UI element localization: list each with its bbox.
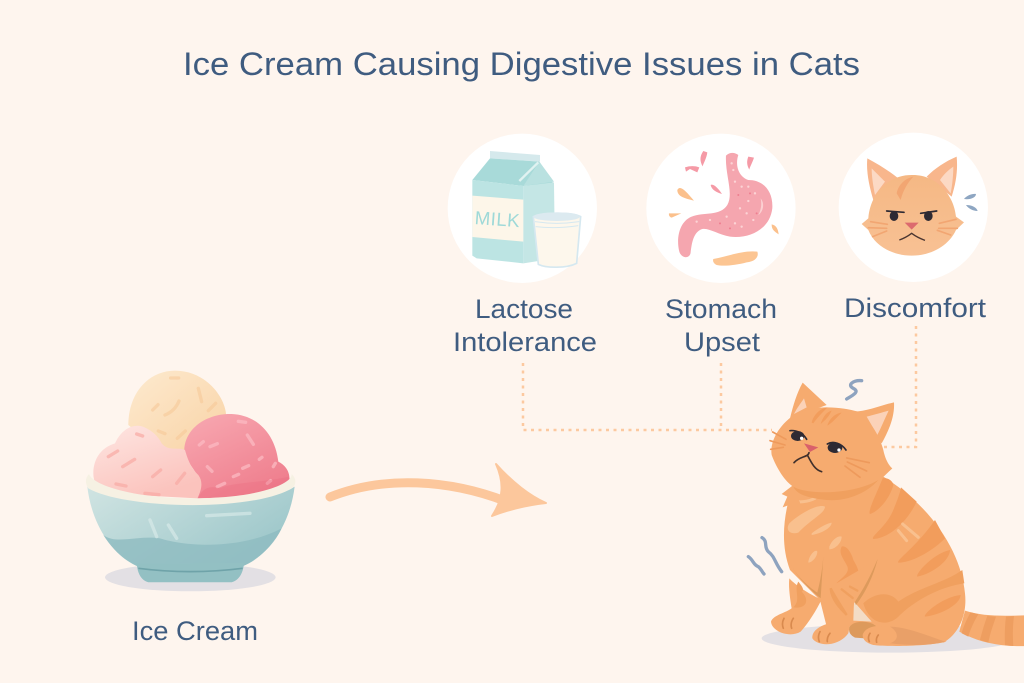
splashes bbox=[669, 151, 779, 266]
label: ice cream: Ice Cream bbox=[132, 616, 258, 646]
milk carton bbox=[472, 151, 555, 263]
milk carton: MILK bbox=[474, 207, 521, 231]
icon: milk circle bbox=[448, 134, 597, 283]
icon: ice cream bowl bbox=[86, 371, 295, 591]
cat head bbox=[770, 407, 892, 507]
bowl rim bbox=[86, 474, 295, 505]
cat eyes bbox=[790, 431, 846, 453]
sweat drops bbox=[964, 194, 978, 211]
label: stomach upset: Stomach bbox=[665, 294, 777, 324]
vanilla scoop bbox=[128, 371, 226, 450]
stomach bbox=[678, 153, 772, 257]
label: stomach upset bbox=[665, 294, 777, 357]
cat tail bbox=[959, 611, 1024, 646]
squiggles beside body bbox=[748, 538, 782, 574]
icon: sitting cat bbox=[748, 381, 1024, 653]
cat front legs bbox=[771, 557, 947, 646]
glass of milk bbox=[533, 212, 581, 267]
cat body bbox=[784, 477, 965, 643]
strawberry scoop bbox=[184, 414, 290, 498]
label: stomach upset: Upset bbox=[684, 327, 761, 357]
title: Ice Cream Causing Digestive Issues in Cats bbox=[183, 46, 860, 82]
cat shadow bbox=[762, 624, 1018, 653]
label: lactose intolerance: Lactose bbox=[475, 294, 573, 324]
squiggle above head bbox=[847, 381, 862, 399]
cat ears bbox=[790, 383, 894, 443]
label: lactose intolerance bbox=[453, 294, 597, 357]
cat face ears bbox=[867, 157, 957, 200]
bowl body bbox=[87, 487, 295, 567]
cat nose bbox=[804, 443, 818, 452]
cat face eyes bbox=[887, 211, 937, 213]
icon: discomfort cat face circle bbox=[839, 133, 988, 282]
dotted connectors bbox=[523, 326, 916, 447]
cat frown bbox=[794, 453, 822, 472]
label: discomfort: Discomfort bbox=[844, 293, 987, 323]
cat face nose and mouth bbox=[905, 223, 919, 230]
bowl foot bbox=[137, 563, 244, 582]
pink scoop bbox=[93, 426, 201, 498]
cat face head bbox=[862, 175, 964, 256]
icon: stomach circle bbox=[646, 134, 796, 283]
cat face markings bbox=[897, 177, 913, 200]
arrow bbox=[330, 464, 546, 516]
label: lactose intolerance: Intolerance bbox=[453, 327, 597, 357]
